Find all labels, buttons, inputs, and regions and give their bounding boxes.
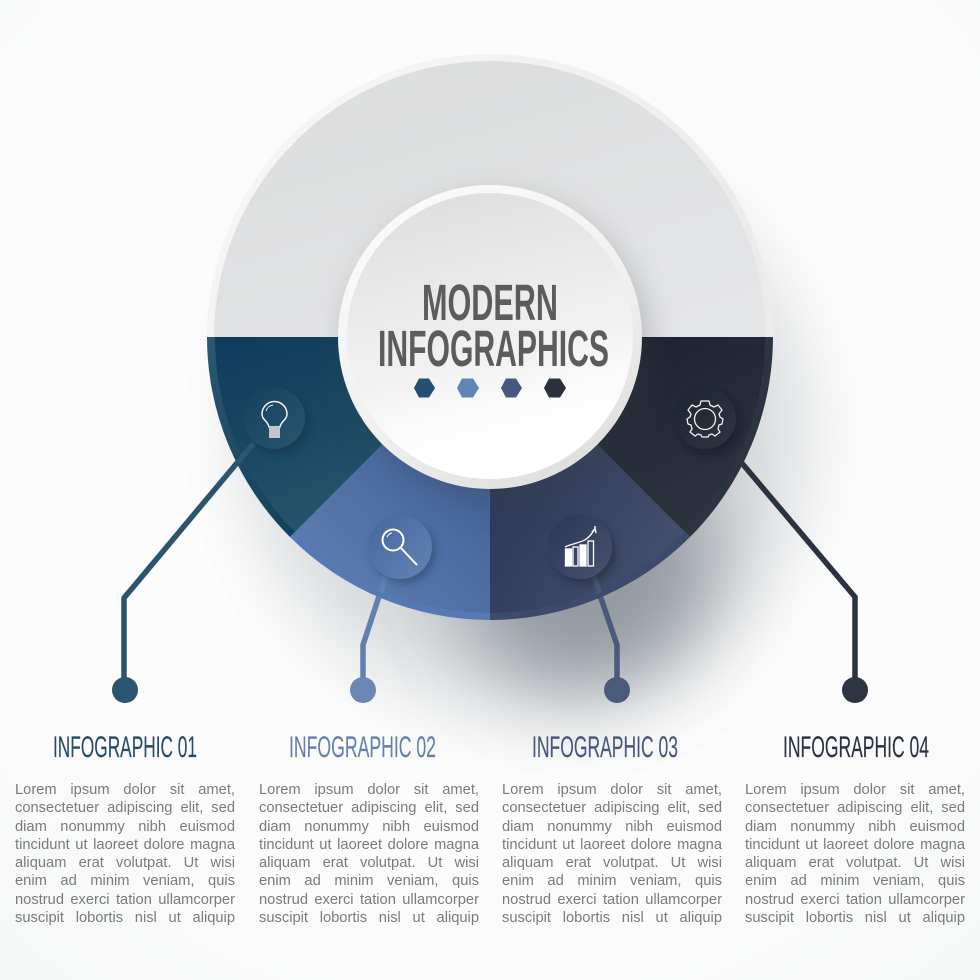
button 1: lightbulb bbox=[243, 387, 309, 454]
text block: infographic 03: diam nonummy nibh euismod bbox=[502, 818, 722, 834]
icon: magnifier bbox=[382, 530, 417, 565]
title: MODERN bbox=[422, 274, 558, 331]
connector line 1 bbox=[124, 445, 252, 690]
connector dot 2 bbox=[350, 677, 376, 703]
panel: infographic 01 bbox=[15, 731, 235, 926]
connector line 3 bbox=[592, 572, 617, 690]
text block: infographic 01: suscipit lobortis nisl ut aliquip bbox=[15, 910, 235, 926]
text block: infographic 01: diam nonummy nibh euismod bbox=[15, 818, 235, 834]
icon: gear bbox=[687, 401, 723, 437]
connector overlays on wedges bbox=[237, 443, 600, 593]
text block: infographic 02: enim ad minim veniam, quis bbox=[259, 873, 479, 889]
text block: infographic 03: nostrud exerci tation ullamcorper bbox=[502, 892, 722, 908]
text block: infographic 04: consectetuer adipiscing elit, sed bbox=[745, 800, 965, 816]
text block: infographic 03: consectetuer adipiscing elit, sed bbox=[502, 800, 722, 816]
text block: infographic 04: aliquam erat volutpat. Ut wisi bbox=[745, 855, 965, 871]
title bbox=[378, 274, 609, 377]
button 3: growth chart bbox=[548, 515, 616, 584]
text block: infographic 04: tincidunt ut laoreet dolore magna bbox=[745, 837, 965, 853]
text block: infographic 02: suscipit lobortis nisl ut aliquip bbox=[259, 910, 479, 926]
text block: infographic 02: tincidunt ut laoreet dolore magna bbox=[259, 837, 479, 853]
connector dot 3 bbox=[604, 677, 630, 703]
center disc shadow bbox=[345, 198, 649, 502]
text block: infographic 02: consectetuer adipiscing elit, sed bbox=[259, 800, 479, 816]
text block: infographic 01: nostrud exerci tation ullamcorper bbox=[15, 892, 235, 908]
text block: infographic 02 bbox=[259, 782, 479, 926]
text block: infographic 01 bbox=[15, 782, 235, 926]
text block: infographic 03: suscipit lobortis nisl ut aliquip bbox=[502, 910, 722, 926]
text block: infographic 01: aliquam erat volutpat. Ut wisi bbox=[15, 855, 235, 871]
connector line 2 bbox=[363, 572, 387, 690]
drop shadow under main ring bbox=[247, 152, 803, 708]
text block: infographic 04: suscipit lobortis nisl ut aliquip bbox=[745, 910, 965, 926]
text block: infographic 03 bbox=[502, 782, 722, 926]
connector dot 1 bbox=[112, 677, 138, 703]
segment 4: charcoal wedge bbox=[490, 337, 773, 537]
text block: infographic 04: diam nonummy nibh euismod bbox=[745, 818, 965, 834]
icon: growth chart bbox=[565, 526, 596, 566]
text block: infographic 03: enim ad minim veniam, quis bbox=[502, 873, 722, 889]
panel: infographic 02 bbox=[259, 731, 479, 926]
button 2: magnifier bbox=[368, 515, 436, 584]
segment 2: blue wedge bbox=[290, 337, 490, 620]
text block: infographic 02: aliquam erat volutpat. Ut wisi bbox=[259, 855, 479, 871]
panel: infographic 04 bbox=[745, 731, 965, 926]
text block: infographic 03: aliquam erat volutpat. Ut wisi bbox=[502, 855, 722, 871]
segment 1: dark teal wedge bbox=[207, 337, 490, 537]
text block: infographic 04: Lorem ipsum dolor sit amet, bbox=[745, 782, 965, 798]
text block: infographic 01: consectetuer adipiscing elit, sed bbox=[15, 800, 235, 816]
text block: infographic 04: nostrud exerci tation ullamcorper bbox=[745, 892, 965, 908]
button 4: gear bbox=[674, 387, 740, 454]
upper grey half of ring bbox=[207, 54, 773, 337]
text block: infographic 03: tincidunt ut laoreet dolore magna bbox=[502, 837, 722, 853]
text block: infographic 02: nostrud exerci tation ullamcorper bbox=[259, 892, 479, 908]
text block: infographic 01: Lorem ipsum dolor sit amet, bbox=[15, 782, 235, 798]
text block: infographic 03: Lorem ipsum dolor sit amet, bbox=[502, 782, 722, 798]
title: INFOGRAPHICS bbox=[378, 320, 609, 377]
segment 3: navy wedge bbox=[490, 337, 690, 620]
text block: infographic 01: tincidunt ut laoreet dolore magna bbox=[15, 837, 235, 853]
connector line 4 bbox=[735, 455, 855, 690]
connector dot 4 bbox=[842, 677, 868, 703]
text block: infographic 02: diam nonummy nibh euismod bbox=[259, 818, 479, 834]
text block: infographic 02: Lorem ipsum dolor sit amet, bbox=[259, 782, 479, 798]
center disc bbox=[338, 185, 642, 489]
text block: infographic 04 bbox=[745, 782, 965, 926]
panel: infographic 03 bbox=[502, 731, 722, 926]
text block: infographic 01: enim ad minim veniam, quis bbox=[15, 873, 235, 889]
hexagon color key bbox=[414, 378, 566, 398]
icon: lightbulb bbox=[262, 402, 287, 438]
text block: infographic 04: enim ad minim veniam, quis bbox=[745, 873, 965, 889]
